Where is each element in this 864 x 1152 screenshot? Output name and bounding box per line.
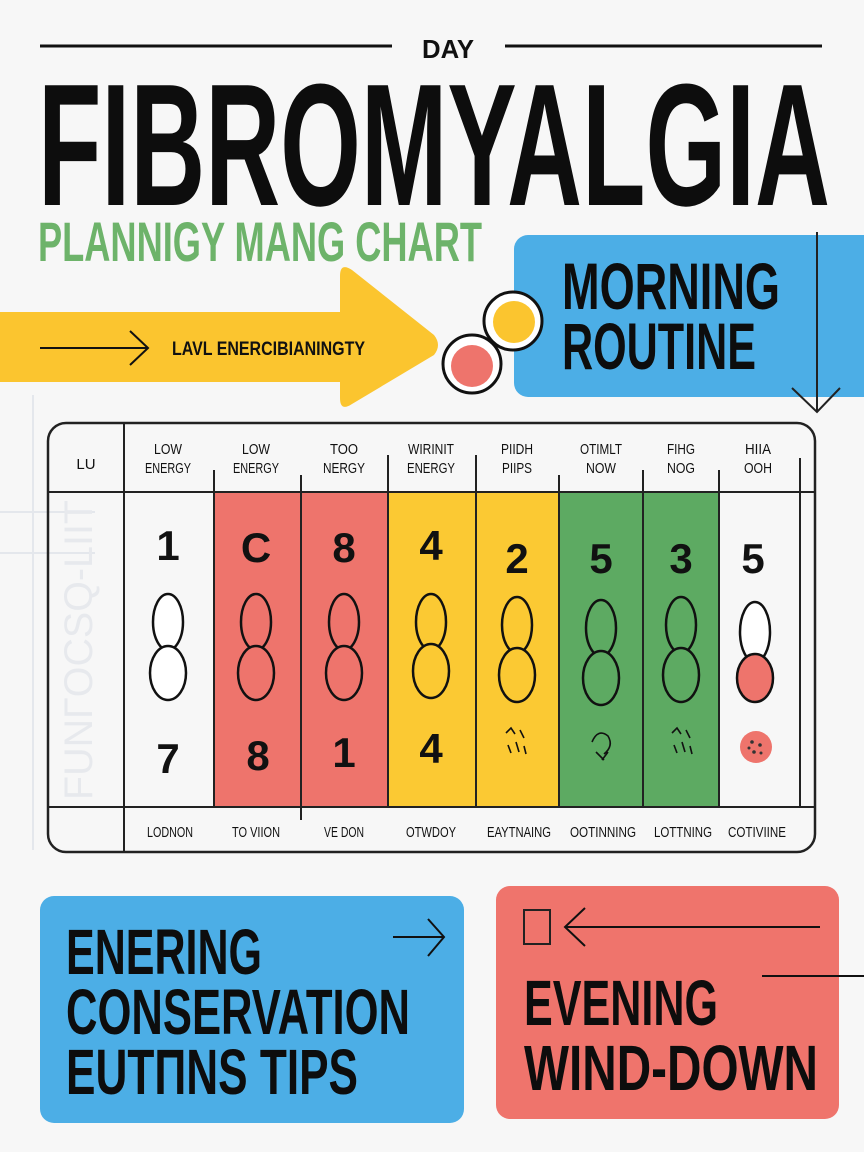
chart: energy table: 8 — [246, 732, 270, 779]
chart: energy table: LOW — [242, 441, 271, 458]
chart: energy table: 8 — [332, 524, 356, 571]
chart: energy table: PIIDH — [501, 441, 533, 458]
arrow: yellow energy level: LAVL ENERCIBIANINGTY — [172, 339, 365, 360]
panel: energy conservation tips: ENERING — [66, 916, 262, 988]
chart: energy table: ENERGY — [145, 460, 191, 477]
chart: energy table: COTIVIINE — [728, 824, 786, 841]
panel: evening wind-down — [496, 886, 864, 1119]
label: DAY: DAY — [422, 34, 474, 64]
chart: energy table: ENERGY — [407, 460, 455, 477]
chart: energy table: FIHG — [667, 441, 695, 458]
panel: energy conservation tips: CONSERVATION — [66, 976, 410, 1048]
panel: morning routine: ROUTINE — [562, 309, 756, 383]
arrow: yellow energy level — [0, 267, 438, 407]
chart: energy table: LODNON — [147, 824, 193, 841]
chart: energy table: OTWDOY — [406, 824, 456, 841]
chart: energy table: VE DON — [324, 824, 364, 841]
chart: energy table: 5 — [589, 535, 613, 582]
chart: energy table: OOH — [744, 460, 772, 477]
chart: energy table: NOW — [586, 460, 617, 477]
chart: energy table: 4 — [419, 725, 443, 772]
panel: energy conservation tips: EUTΠNS TIPS — [66, 1036, 358, 1108]
chart: energy table: 1 — [332, 729, 356, 776]
decorative faint left text: FUNΓOCSQ-LIIT — [57, 500, 101, 800]
chart: energy table: ENERGY — [233, 460, 279, 477]
icon: circles — [443, 292, 542, 393]
panel: evening wind-down: EVENING — [524, 967, 718, 1039]
chart: energy table: LOTTNING — [654, 824, 712, 841]
chart: energy table: 1 — [156, 522, 180, 569]
panel: morning routine — [514, 235, 864, 397]
chart: energy table: WIRINIT — [408, 441, 454, 458]
chart: energy table: OTIMLT — [580, 441, 622, 458]
chart: energy table — [48, 423, 815, 852]
chart: energy table: 5 — [741, 535, 765, 582]
arrow: morning down — [792, 232, 840, 412]
chart: energy table: 2 — [505, 535, 529, 582]
chart: energy table: LOW — [154, 441, 183, 458]
panel: energy conservation tips — [40, 896, 464, 1123]
subtitle: PLANNIGY MANG CHART — [38, 210, 482, 273]
chart: energy table: OOTINNING — [570, 824, 636, 841]
chart: energy table: PIIPS — [502, 460, 532, 477]
chart: energy table: LU — [76, 456, 96, 473]
chart: energy table: TO VIION — [232, 824, 280, 841]
chart: energy table: NERGY — [323, 460, 365, 477]
chart: energy table: TOO — [330, 441, 358, 458]
chart: energy table: HIIA — [745, 441, 771, 458]
chart: energy table: 7 — [156, 735, 180, 782]
chart: energy table: 3 — [669, 535, 693, 582]
chart: energy table: 4 — [419, 522, 443, 569]
chart: energy table: EAYTNAING — [487, 824, 551, 841]
chart: energy table: NOG — [667, 460, 695, 477]
chart: energy table: C — [241, 524, 271, 571]
